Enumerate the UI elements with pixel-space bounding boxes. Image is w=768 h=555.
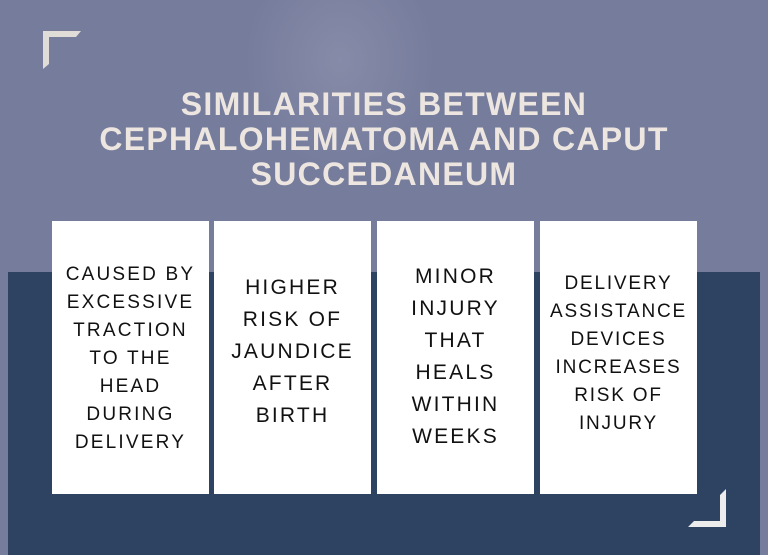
card 1: HEAD <box>100 376 161 396</box>
card 1: TO THE <box>89 348 172 368</box>
card 1 <box>52 221 209 494</box>
title: SUCCEDANEUM <box>251 156 517 192</box>
title: SIMILARITIES BETWEEN <box>181 86 587 122</box>
card 3: WEEKS <box>412 424 499 448</box>
card 4: INJURY <box>579 412 658 434</box>
card 1: EXCESSIVE <box>67 292 194 312</box>
card 3: MINOR <box>415 264 496 288</box>
title <box>99 86 669 192</box>
card 4: RISK OF <box>574 384 663 406</box>
card 2: BIRTH <box>256 404 329 426</box>
card 1: DURING <box>86 404 175 424</box>
card 3: HEALS <box>416 360 495 384</box>
card 3: INJURY <box>411 296 500 320</box>
card 2: RISK OF <box>243 308 342 330</box>
card 4 <box>540 221 697 494</box>
card 1: DELIVERY <box>75 432 186 452</box>
card 2: JAUNDICE <box>231 340 354 362</box>
card 3 <box>377 221 534 494</box>
icon: top-left corner bracket <box>43 31 81 69</box>
navy panel <box>8 272 760 555</box>
card 4: DELIVERY <box>564 272 673 294</box>
card 2: HIGHER <box>245 276 340 298</box>
card 2: AFTER <box>253 372 332 394</box>
card 3: THAT <box>424 328 487 352</box>
icon: bottom-right corner bracket <box>688 489 726 527</box>
card 1: CAUSED BY <box>66 264 195 284</box>
title: CEPHALOHEMATOMA AND CAPUT <box>99 121 669 157</box>
card 4: ASSISTANCE <box>550 300 687 322</box>
card 1: TRACTION <box>73 320 188 340</box>
card 4: INCREASES <box>555 356 682 378</box>
card 4: DEVICES <box>570 328 666 350</box>
card 3: WITHIN <box>412 392 499 416</box>
card 2 <box>214 221 371 494</box>
